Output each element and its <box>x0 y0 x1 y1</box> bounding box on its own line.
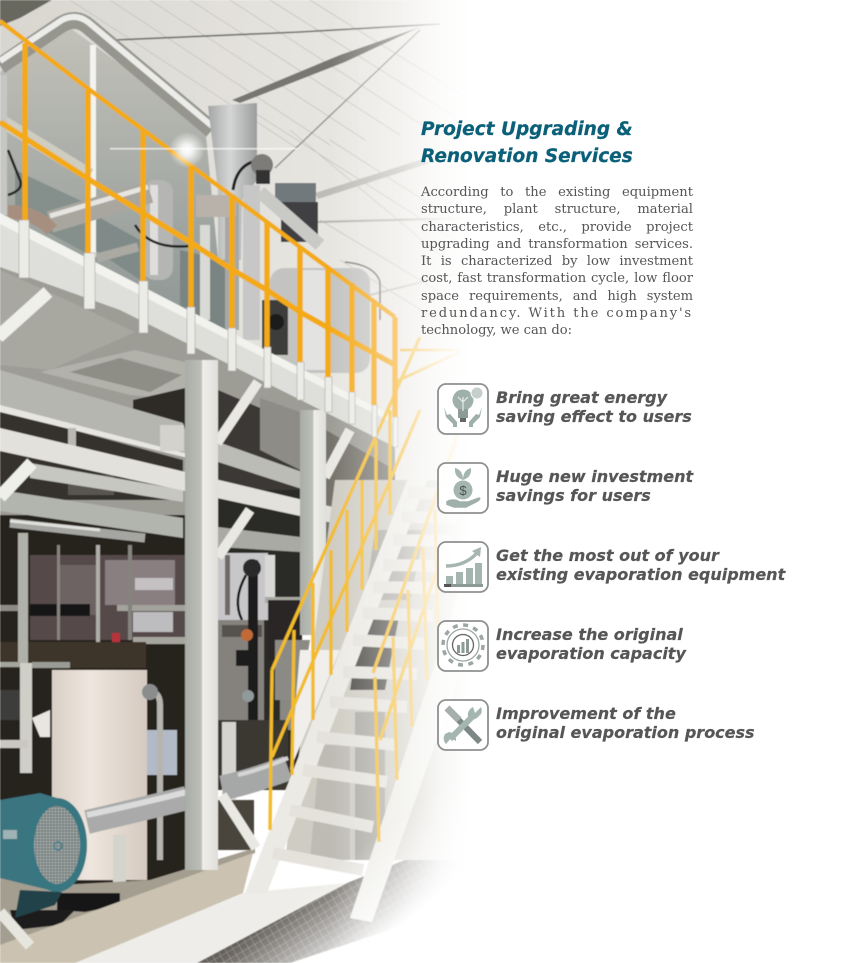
item text: Huge new investment <box>496 467 693 486</box>
intro paragraph: It is characterized by low investment <box>421 254 693 269</box>
benefit item: capacity <box>437 620 687 672</box>
title <box>421 119 633 167</box>
intro paragraph: upgrading and transformation services. <box>421 237 693 252</box>
icon: light bulb held by hands <box>437 383 489 435</box>
item text: Bring great energy <box>496 388 667 407</box>
benefit item: process improvement <box>437 699 755 751</box>
item text: savings for users <box>496 486 651 505</box>
item text <box>496 704 755 742</box>
icon: coin with sprout on hand: $ <box>459 483 467 498</box>
title: Project Upgrading & <box>421 119 633 140</box>
icon: gear with chart <box>437 620 489 672</box>
intro paragraph: cost, fast transformation cycle, low floor <box>421 271 693 286</box>
item text <box>496 388 692 426</box>
item text: Improvement of the <box>496 704 676 723</box>
intro paragraph: redundancy. With the company's <box>421 306 693 321</box>
benefit item: existing equipment <box>437 541 786 593</box>
title: Renovation Services <box>421 146 633 167</box>
intro paragraph: characteristics, etc., provide project <box>421 220 693 235</box>
intro paragraph <box>420 185 693 338</box>
icon: crossed wrench and screwdriver <box>437 699 489 751</box>
intro paragraph: technology, we can do: <box>421 323 572 338</box>
item text: original evaporation process <box>496 723 755 742</box>
intro paragraph: space requirements, and high system <box>421 289 693 304</box>
intro paragraph: According to the existing equipment <box>421 185 693 200</box>
item text: existing evaporation equipment <box>496 565 785 584</box>
intro paragraph: structure, plant structure, material <box>421 202 693 217</box>
item text: evaporation capacity <box>496 644 686 663</box>
item text: Increase the original <box>496 625 683 644</box>
item text <box>496 625 687 663</box>
benefit item: investment savings <box>437 462 694 514</box>
item text: saving effect to users <box>496 407 692 426</box>
icon: coin with sprout on hand <box>437 462 489 514</box>
icon: rising bar chart <box>437 541 489 593</box>
benefit item: energy saving <box>437 383 692 435</box>
item text: Get the most out of your <box>496 546 719 565</box>
item text <box>496 546 786 584</box>
item text <box>496 467 694 505</box>
